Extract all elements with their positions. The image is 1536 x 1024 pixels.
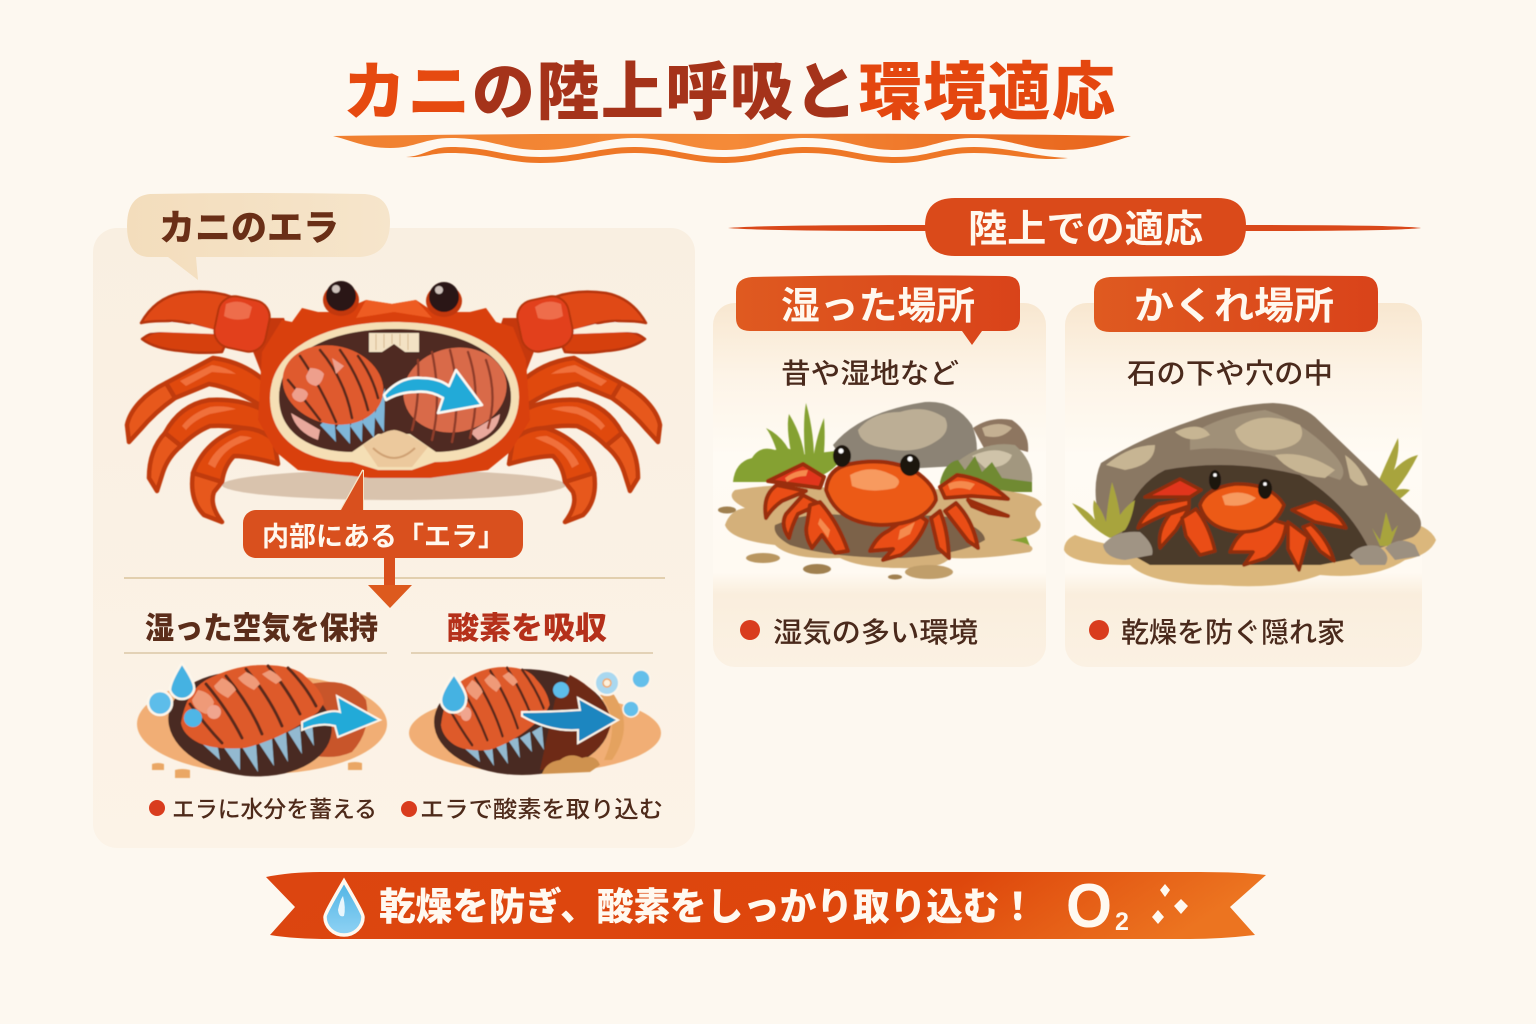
O2 mark: 2	[1115, 908, 1129, 936]
heading: 酸素を吸収	[447, 611, 607, 646]
crab	[765, 462, 1008, 560]
speech bubble heading	[127, 193, 390, 280]
speech bubble heading: カニのエラ	[159, 207, 339, 248]
airflow arrow	[384, 370, 482, 413]
sparkles	[1152, 884, 1188, 924]
description: 石の下や穴の中	[1127, 358, 1333, 389]
card background	[713, 303, 1046, 667]
section header: 陸上での適応	[728, 198, 1421, 256]
divider with pointer arrow	[124, 556, 665, 608]
eyes	[833, 445, 920, 476]
left claw and legs	[127, 292, 304, 522]
crab anatomy illustration	[127, 281, 660, 522]
rocks	[833, 402, 977, 472]
ground shadow	[222, 470, 566, 500]
caption: エラで酸素を取り込む	[420, 796, 663, 822]
left gill	[274, 335, 392, 444]
mouth	[363, 430, 428, 467]
gill chamber interior	[279, 329, 511, 452]
ribbon	[266, 872, 1266, 939]
foreground grass	[1072, 482, 1135, 538]
title wave underline	[333, 134, 1131, 163]
rock	[1096, 403, 1421, 548]
crab	[1138, 479, 1346, 570]
sub-panel: 湿った空気を保持	[124, 611, 387, 822]
gill illustration: oxygen	[409, 667, 661, 775]
right claw and legs	[483, 292, 660, 522]
panel: カニのエラ	[93, 193, 695, 848]
carapace	[258, 300, 530, 478]
tag heading	[736, 275, 1020, 345]
panel: 湿った場所	[713, 275, 1046, 667]
eyes	[1209, 470, 1272, 499]
sub-panel: 酸素を吸収	[401, 611, 663, 822]
gill chamber rim	[270, 322, 519, 470]
heading rule	[124, 652, 387, 654]
grass	[733, 403, 845, 482]
bullet caption: 湿気の多い環境	[773, 617, 978, 648]
heading rule	[411, 652, 653, 654]
ground	[725, 485, 1042, 568]
gill comb	[369, 333, 419, 352]
caption: エラに水分を蓄える	[172, 796, 377, 822]
eyes	[323, 281, 462, 317]
tag heading: 湿った場所	[781, 286, 975, 328]
description: 昔や湿地など	[781, 358, 959, 389]
panel background	[93, 228, 695, 848]
grass	[1375, 438, 1418, 505]
card background	[1065, 303, 1422, 667]
tag heading	[1094, 276, 1378, 332]
right gill	[395, 338, 515, 442]
title: カニの陸上呼吸と環境適応	[343, 58, 1115, 128]
tag heading: かくれ場所	[1134, 286, 1334, 328]
icon: water drop	[325, 881, 363, 935]
cave	[1120, 465, 1372, 565]
callout: 内部にある「エラ」	[243, 470, 523, 558]
bullet caption: 乾燥を防ぐ隠れ家	[1121, 617, 1345, 648]
heading: 湿った空気を保持	[145, 611, 378, 646]
O2 mark: O	[1066, 872, 1112, 941]
bottom banner	[266, 872, 1266, 941]
gill illustration: moisture	[137, 663, 387, 784]
stones	[1103, 532, 1152, 560]
illustration: crab hiding under rock	[1064, 403, 1436, 586]
slogan: 乾燥を防ぎ、酸素をしっかり取り込む！	[379, 886, 1036, 929]
ground	[1064, 520, 1436, 586]
illustration: crab by rocks on damp ground	[718, 402, 1042, 580]
section header: 陸上での適応: 陸上での適応	[968, 209, 1203, 251]
panel: かくれ場所	[1064, 276, 1436, 667]
callout: 内部にある「エラ」: 内部にある「エラ」	[262, 522, 505, 552]
